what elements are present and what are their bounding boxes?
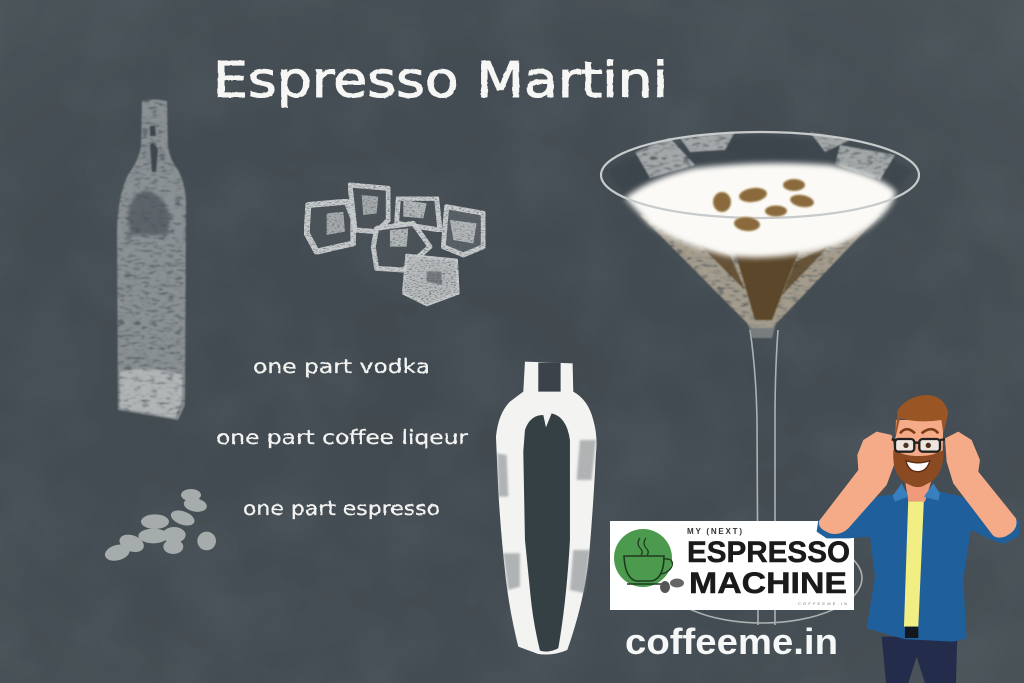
undershirt <box>904 498 924 627</box>
ice cube 6 <box>403 255 458 305</box>
website url: coffeeme.in <box>625 621 838 662</box>
ice cube 5 <box>373 223 430 270</box>
collar <box>893 483 940 502</box>
rim shading <box>635 132 895 180</box>
glasses <box>892 439 945 452</box>
beard <box>893 450 943 487</box>
dark glass interior <box>608 136 912 195</box>
character: bearded man with glasses <box>817 395 1021 683</box>
right arm <box>945 432 1017 538</box>
glass stem and foot <box>662 330 862 625</box>
glass base knot <box>745 315 778 338</box>
smile <box>906 461 930 472</box>
foam <box>625 163 896 258</box>
coffee core <box>734 248 800 320</box>
coffee edges <box>700 245 830 295</box>
eyebrows <box>900 429 938 433</box>
foam beans <box>713 179 815 232</box>
icon: ice cubes <box>307 185 483 305</box>
title: Espresso Martini <box>213 52 668 109</box>
ice cube 4 <box>443 207 483 255</box>
logo text: machine: MACHINE <box>689 567 847 600</box>
belt gap <box>905 627 918 638</box>
ice cube 3 <box>397 198 440 230</box>
trousers <box>882 637 957 683</box>
face <box>895 420 943 457</box>
logo icon: green circle with coffee cup <box>614 529 684 593</box>
icon: coffee beans <box>103 489 216 563</box>
logo panel <box>610 521 854 610</box>
logo text: my (next): MY (NEXT) <box>687 527 742 536</box>
glass bowl chalk shading <box>640 215 880 328</box>
shirt <box>817 492 1021 642</box>
logo text: espresso: ESPRESSO <box>687 536 850 569</box>
eyes <box>903 443 931 448</box>
brand logo <box>610 521 854 610</box>
hair <box>895 395 948 440</box>
left arm <box>819 432 895 534</box>
neck <box>905 480 932 502</box>
ingredient: one part coffee liqeur: one part coffee liqeur <box>216 426 469 449</box>
ice cube 2 <box>350 185 388 232</box>
glass rim <box>601 132 919 218</box>
icon: cocktail shaker <box>496 362 597 654</box>
ingredient: one part vodka: one part vodka <box>253 355 430 378</box>
logo text: coffeeme.in: COFFEEME.IN <box>798 601 847 606</box>
icon: vodka bottle <box>117 100 186 420</box>
ingredient: one part espresso: one part espresso <box>243 497 440 520</box>
ice cube 1 <box>307 202 353 252</box>
martini glass <box>601 132 919 625</box>
